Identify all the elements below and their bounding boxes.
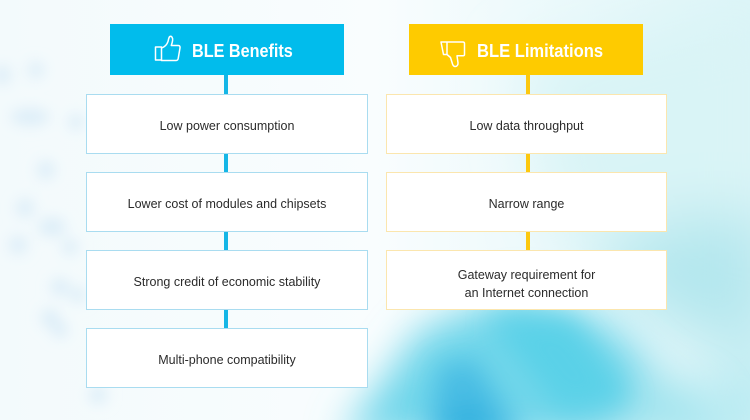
heading: BLE Limitations: BLE Limitations <box>477 41 603 61</box>
card: Low data throughput: Low data throughput <box>470 119 583 133</box>
card: Lower cost of modules and chipsets: Lower cost of modules and chipsets <box>128 197 326 211</box>
card: Low data throughput <box>386 94 667 154</box>
panel: BLE Benefits header <box>110 24 344 75</box>
panel: BLE Limitations header <box>409 24 643 75</box>
card: Low power consumption <box>86 94 368 154</box>
connector: limitations line <box>526 75 530 251</box>
card: Multi-phone compatibility: Multi-phone compatibility <box>158 353 296 367</box>
card: Gateway requirement: an Internet connection <box>465 286 588 300</box>
heading: BLE Benefits: BLE Benefits <box>192 41 293 61</box>
card: Multi-phone compatibility <box>86 328 368 388</box>
card: Gateway requirement: Gateway requirement for <box>458 268 595 282</box>
card: Gateway requirement <box>386 250 667 310</box>
card: Narrow range <box>386 172 667 232</box>
icon: thumbs up <box>154 36 181 62</box>
connector: benefits line <box>224 75 228 329</box>
card: Lower cost of modules and chipsets <box>86 172 368 232</box>
card: Narrow range: Narrow range <box>489 197 564 211</box>
card: Low power consumption: Low power consumption <box>160 119 294 133</box>
card: Strong credit of economic stability <box>86 250 368 310</box>
icon: thumbs down <box>440 41 466 68</box>
card: Strong credit of economic stability: Strong credit of economic stability <box>134 275 320 289</box>
